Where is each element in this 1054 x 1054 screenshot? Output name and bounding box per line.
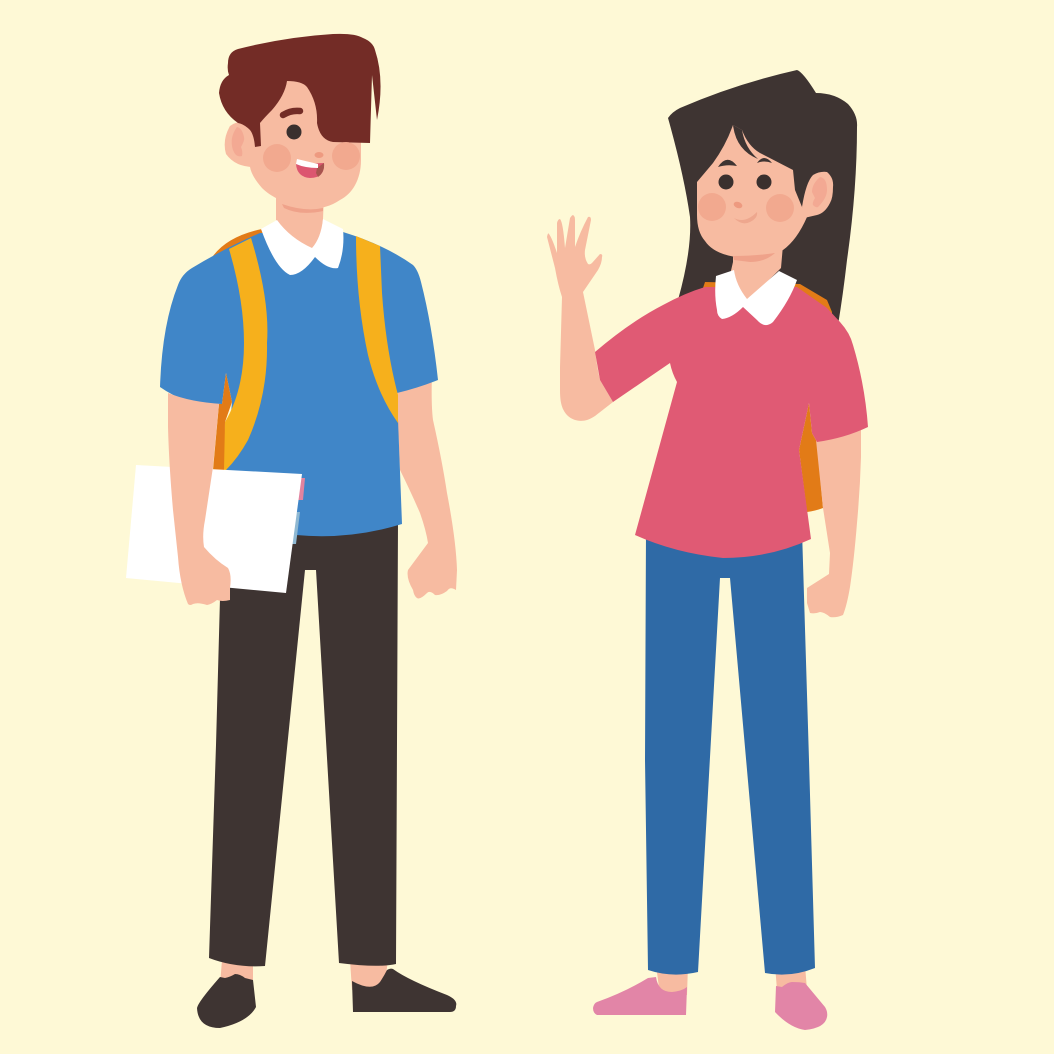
boy hair <box>219 34 381 147</box>
girl head <box>697 125 807 258</box>
boy right ankle <box>350 960 388 990</box>
boy backpack side <box>213 373 232 470</box>
girl inner ear <box>812 177 827 207</box>
boy inner ear <box>232 127 244 156</box>
girl backpack side <box>799 403 823 512</box>
girl smile <box>734 212 757 223</box>
pink book tab <box>298 478 305 500</box>
boy right arm <box>396 372 457 598</box>
girl left shoe <box>593 977 687 1015</box>
boy left arm and hand <box>168 393 231 605</box>
boy right cheek <box>332 142 360 170</box>
boy nose <box>314 152 324 158</box>
girl left cheek <box>698 193 726 221</box>
boy mouth <box>296 163 324 178</box>
girl waving arm and hand <box>547 215 613 421</box>
boy backpack top <box>213 229 270 262</box>
girl left ankle <box>656 965 688 995</box>
boy neck <box>276 195 324 250</box>
girl jeans <box>645 530 815 975</box>
girl hair strand <box>733 125 758 159</box>
boy right backpack strap <box>356 236 398 423</box>
girl backpack top <box>703 282 832 330</box>
boy ear <box>225 122 257 167</box>
boy tongue <box>316 163 324 177</box>
girl right eye <box>756 174 772 190</box>
boy left cheek <box>263 144 291 172</box>
boy blue sweater <box>160 232 438 536</box>
boy neck shadow <box>282 204 323 213</box>
boy notebook <box>126 465 302 593</box>
girl right shoe <box>775 982 827 1030</box>
boy left backpack strap <box>222 238 267 470</box>
boy head <box>250 75 361 209</box>
boy left ankle <box>220 960 253 985</box>
girl right ankle <box>775 965 807 990</box>
boy trousers <box>209 522 398 966</box>
boy eye <box>286 124 302 140</box>
girl collar <box>715 270 797 325</box>
illustration: girl student <box>547 70 868 1030</box>
boy collar <box>261 219 343 275</box>
boy teeth <box>296 159 318 168</box>
illustration: boy student <box>126 34 457 1028</box>
girl neck <box>730 245 783 302</box>
girl left eyebrow <box>718 160 737 167</box>
girl hair back <box>668 70 857 325</box>
girl pink shirt <box>595 287 868 558</box>
girl neck shadow <box>733 253 775 262</box>
blue book tab <box>292 512 300 544</box>
girl ear <box>802 172 833 218</box>
girl right eyebrow <box>757 158 772 163</box>
girl nose <box>733 201 743 209</box>
girl right cheek <box>766 194 794 222</box>
boy eyebrow <box>283 111 300 115</box>
girl left eye <box>718 174 734 190</box>
boy right shoe <box>352 969 456 1012</box>
boy left shoe <box>197 974 256 1028</box>
girl right arm and hand <box>807 430 861 617</box>
